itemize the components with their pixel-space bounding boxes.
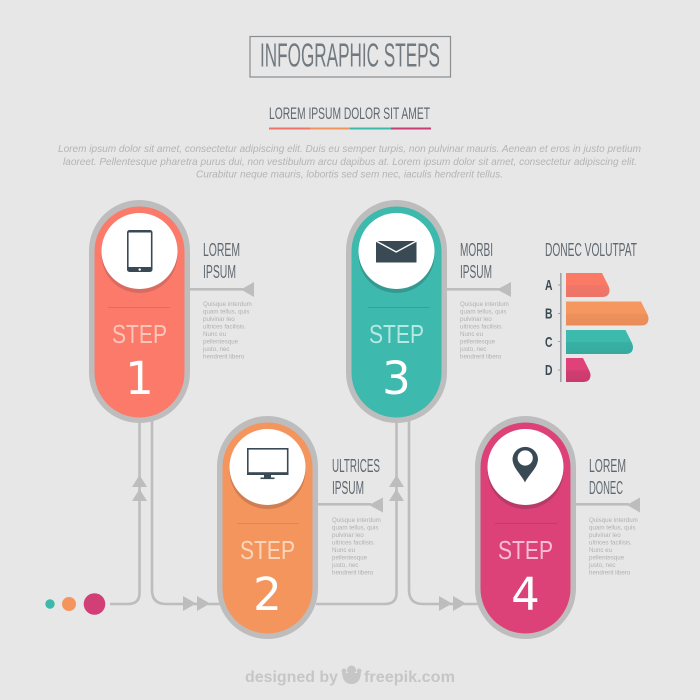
footer credit: designed by: [245, 669, 338, 686]
step 4 callout: justo, nec: [588, 562, 615, 569]
step 2 callout: [318, 456, 383, 576]
step 3 callout: justo, nec: [459, 346, 486, 353]
step 4 callout: pulvinar leo: [589, 532, 621, 539]
step 2: STEP: [240, 535, 295, 565]
step 3 callout: Quisque interdum: [460, 301, 509, 308]
step 4 callout: Quisque interdum: [589, 517, 638, 524]
title: [250, 36, 450, 77]
description text: Curabitur neque mauris, lobortis sed sem nec, iaculis hendrerit tellus.: [196, 168, 503, 180]
step 2 callout: ULTRICES: [332, 456, 380, 476]
subtitle: LOREM IPSUM DOLOR SIT AMET: [269, 104, 430, 123]
step 4 callout: LOREM: [589, 456, 626, 476]
step 4 callout: [576, 456, 640, 576]
step 2 callout: pulvinar leo: [332, 532, 364, 539]
step 3 callout: pulvinar leo: [460, 316, 492, 323]
step 1: STEP: [112, 319, 167, 349]
icon: freepik logo: [342, 666, 362, 684]
step 1 callout: justo, nec: [202, 346, 229, 353]
connector lines: [110, 420, 478, 604]
step 2 callout: ultrices facilisis.: [332, 540, 375, 546]
step 1: [89, 200, 190, 423]
step 4 callout: hendrerit libero: [589, 570, 631, 576]
step 3 callout: MORBI: [460, 240, 493, 260]
step 1 callout: Nunc eu: [203, 331, 227, 338]
step 2 callout: Quisque interdum: [332, 517, 381, 524]
title: INFOGRAPHIC STEPS: [260, 36, 440, 74]
step 4 callout: Nunc eu: [589, 547, 613, 554]
step 1 callout: LOREM: [203, 240, 240, 260]
step 4: STEP: [498, 535, 553, 565]
footer credit: [245, 666, 455, 686]
step 3: [346, 200, 447, 423]
step 4: 4: [511, 568, 540, 621]
step 2 callout: quam tellus, quis: [332, 524, 378, 532]
step 4: [475, 416, 576, 639]
step 3 callout: hendrerit libero: [460, 354, 502, 360]
step 2 callout: Nunc eu: [332, 547, 356, 554]
step 1 callout: pellentesque: [203, 338, 239, 346]
step 3 callout: quam tellus, quis: [460, 308, 506, 316]
step 4 callout: ultrices facilisis.: [589, 540, 632, 546]
step 1 callout: IPSUM: [203, 262, 236, 282]
step 2: [217, 416, 318, 639]
step 3 callout: ultrices facilisis.: [460, 324, 503, 330]
step 1 callout: Quisque interdum: [203, 301, 252, 308]
step 1 callout: pulvinar leo: [203, 316, 235, 323]
footer credit: freepik.com: [364, 669, 455, 686]
step 4 callout: DONEC: [589, 478, 623, 498]
step 1 callout: ultrices facilisis.: [203, 324, 246, 330]
step 3: 3: [382, 352, 411, 405]
bar chart: D: [545, 362, 553, 379]
description text: Lorem ipsum dolor sit amet, consectetur adipiscing elit. Duis eu semper turpis, non pulvinar mauris. Aenean et eros in justo pretium: [58, 143, 641, 155]
start dots: [45, 593, 105, 615]
bar chart: A: [545, 277, 553, 294]
step 4 callout: quam tellus, quis: [589, 524, 635, 532]
step 2 callout: hendrerit libero: [332, 570, 374, 576]
step 3 callout: IPSUM: [460, 262, 492, 282]
step 2 callout: pellentesque: [332, 554, 368, 562]
icon: monitor: [247, 448, 288, 479]
icon: envelope: [376, 241, 416, 262]
step 3 callout: pellentesque: [460, 338, 496, 346]
step 1 callout: quam tellus, quis: [203, 308, 249, 316]
step 2 callout: IPSUM: [332, 478, 364, 498]
step 3 callout: Nunc eu: [460, 331, 484, 338]
step 1: 1: [125, 352, 154, 405]
arrows: [132, 475, 466, 611]
step 2 callout: justo, nec: [331, 562, 358, 569]
description text: laoreet. Pellentesque pharetra purus dui, non vestibulum arcu dapibus at. Lorem ipsum dolor sit amet, consectetur adipiscing elit.: [63, 156, 637, 168]
step 3 callout: [447, 240, 511, 360]
step 1 callout: hendrerit libero: [203, 354, 245, 360]
step 3: STEP: [369, 319, 424, 349]
icon: tablet: [127, 230, 152, 272]
icon: map pin: [512, 447, 538, 482]
bar chart: C: [545, 334, 553, 351]
step 2: 2: [253, 568, 282, 621]
bar chart: [545, 240, 648, 382]
bar chart: B: [545, 306, 553, 322]
step 1 callout: [190, 240, 254, 360]
description text: [58, 143, 641, 180]
step 4 callout: pellentesque: [589, 554, 625, 562]
